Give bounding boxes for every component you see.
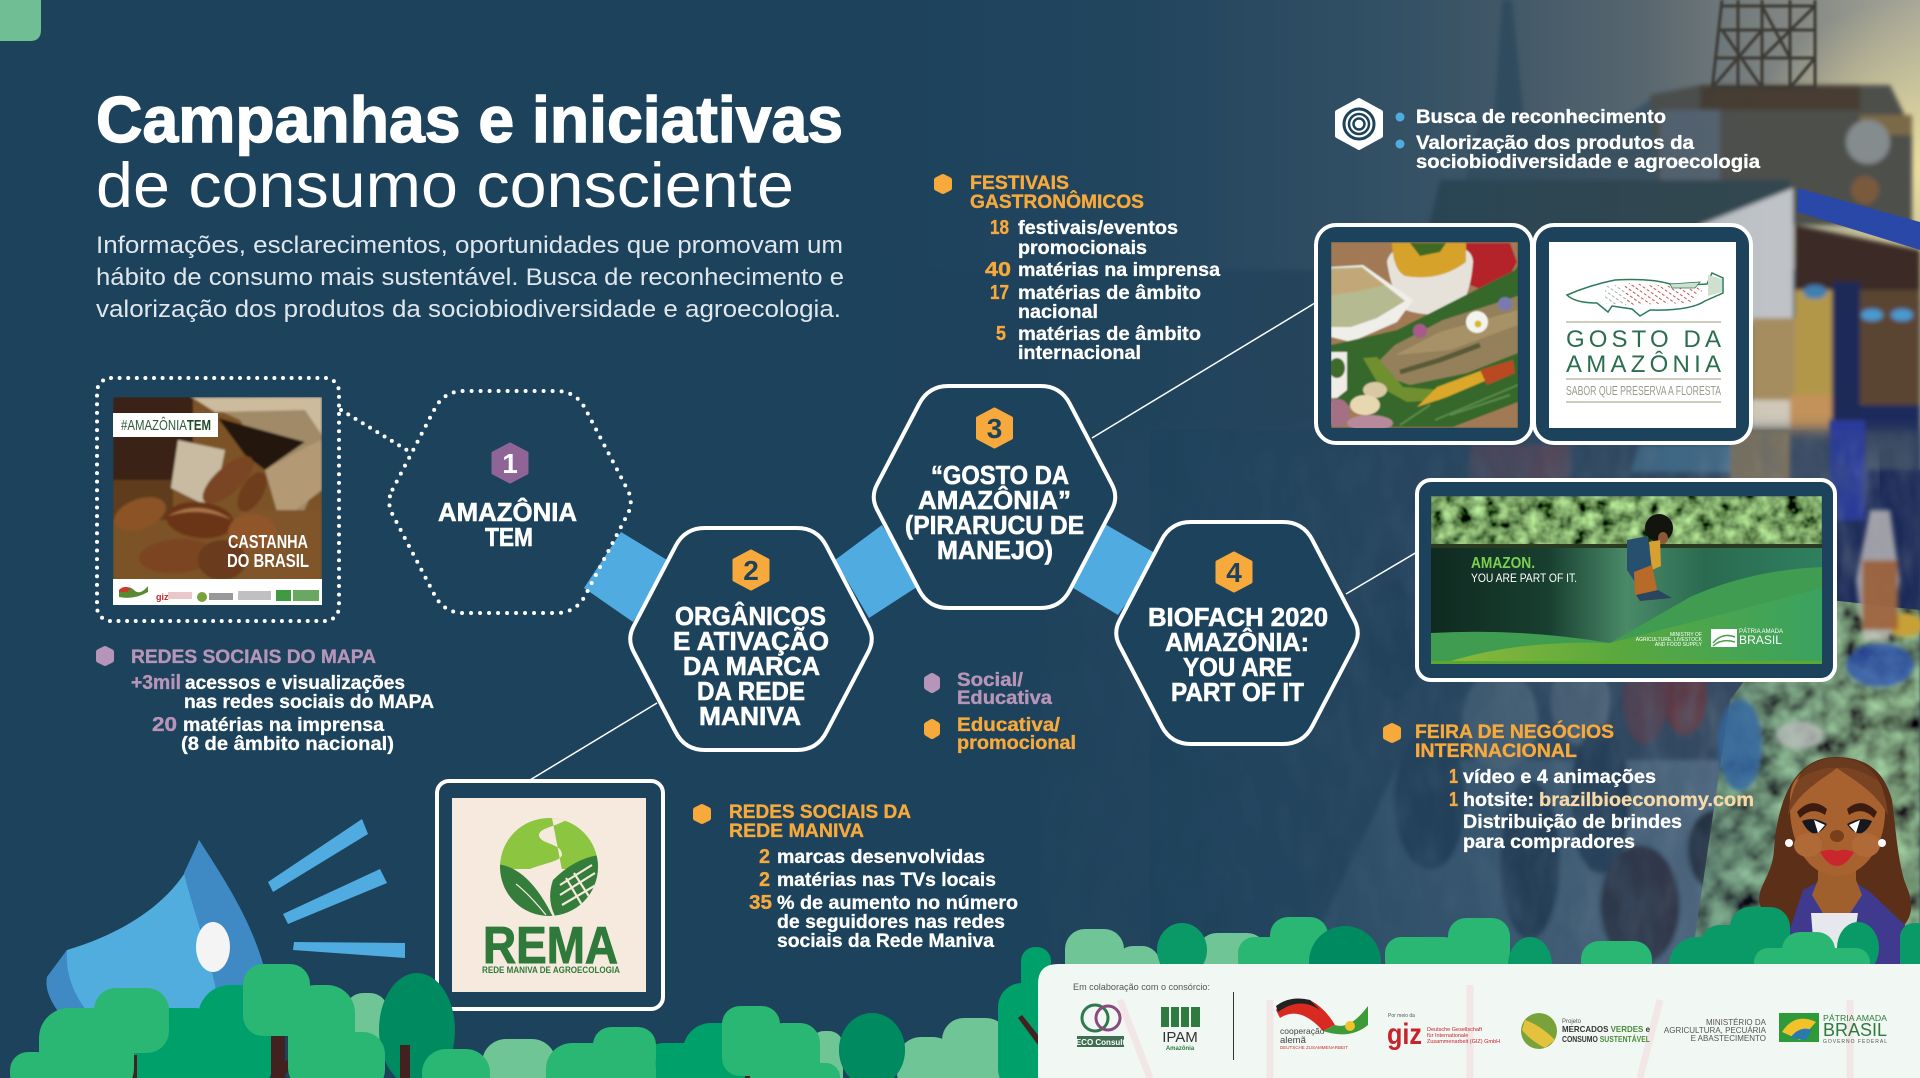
logo: giz: Zusammenarbeit (GIZ) GmbH [1427, 1039, 1500, 1045]
image panel: Amazon, you are part of it: YOU ARE PART OF IT. [1471, 573, 1577, 585]
forest foreground [10, 947, 1051, 1078]
stats: Redes sociais da Rede Maniva [696, 802, 1018, 952]
hexagon 4: Biofach: 4 [1226, 557, 1242, 588]
image panel: Amazon, you are part of it: PÁTRIA AMADA [1739, 628, 1783, 635]
hexagon 3: Gosto da Amazônia: (PIRARUCU DE [905, 510, 1084, 540]
icon: REMA leaf logo [496, 818, 600, 920]
stats: Festivais gastronômicos: 5 [996, 323, 1006, 345]
stats: Feira de negócios internacional [1386, 721, 1754, 853]
stats: Redes sociais da Rede Maniva: 2 [759, 846, 770, 868]
objectives list: Busca de reconhecimento [1416, 107, 1666, 128]
stats: Feira de negócios internacional: vídeo e 4 animações [1463, 766, 1656, 788]
stats: Festivais gastronômicos: promocionais [1018, 237, 1147, 259]
logo: Ministério da Agricultura: MINISTÉRIO DA [1706, 1018, 1767, 1027]
image panel: REMA logo [437, 781, 663, 1009]
stats: Redes sociais da Rede Maniva: 35 [749, 892, 772, 914]
hexagon 2: Orgânicos: DA MARCA [683, 651, 820, 681]
connector: MAPA image to hexagon 1 [341, 410, 410, 452]
logo: cooperação alemã: DEUTSCHE ZUSAMMENARBEIT [1280, 1045, 1348, 1050]
stats: Redes sociais da Rede Maniva: matérias nas TVs locais [777, 869, 996, 891]
logo: Mercados Verdes [1521, 1013, 1650, 1049]
legend: promocional [957, 733, 1076, 754]
megaphone [47, 819, 405, 1060]
stats: Feira de negócios internacional: FEIRA DE NEGÓCIOS [1415, 721, 1614, 743]
stats: Festivais gastronômicos: matérias de âmbito [1018, 323, 1201, 345]
hexagon 4: Biofach: AMAZÔNIA: [1165, 627, 1309, 657]
stats: Festivais gastronômicos: 17 [990, 282, 1009, 304]
icon: pirarucu fish [1567, 273, 1723, 316]
logo: IPAM [1161, 1007, 1200, 1052]
logo: IPAM: Amazônia [1166, 1046, 1195, 1052]
hexagon 3: Gosto da Amazônia: 3 [987, 413, 1002, 444]
title: de consumo consciente [96, 151, 794, 221]
image panel: food photo [1316, 225, 1532, 443]
icon: target in white hexagon [1337, 100, 1381, 148]
logo: Ministério da Agricultura: AGRICULTURA, PECUÁRIA [1664, 1026, 1767, 1035]
stats: Feira de negócios internacional: Distribuição de brindes [1463, 811, 1682, 833]
image panel: Gosto da Amazônia logo: GOSTO DA [1566, 326, 1721, 353]
icon: sound rays [268, 819, 405, 958]
consortium caption: Em colaboração com o consórcio: [1073, 982, 1210, 993]
stats: Redes sociais da Rede Maniva: de seguidores nas redes [777, 911, 1005, 933]
objectives list: sociobiodiversidade e agroecologia [1416, 152, 1760, 173]
crowd base [1040, 430, 1920, 990]
stats: Feira de negócios internacional: 1 [1449, 789, 1458, 811]
legend [927, 670, 1076, 754]
stats: Feira de negócios internacional: 1 [1449, 766, 1458, 788]
logo: giz [1387, 1013, 1500, 1051]
stats: Feira de negócios internacional: brazilbioeconomy.com [1539, 789, 1754, 811]
stats: Redes sociais do MAPA: matérias na imprensa [183, 714, 384, 736]
logo: cooperação alemã: alemã [1280, 1035, 1307, 1046]
stats: Festivais gastronômicos [937, 173, 1220, 364]
image panel: Gosto da Amazônia logo: AMAZÔNIA [1566, 350, 1721, 378]
logo: Ministério da Agricultura [1664, 1018, 1767, 1043]
objectives list: Valorização dos produtos da [1416, 133, 1694, 154]
character: woman [1759, 757, 1911, 964]
background photo: port and crowd [1186, 0, 1920, 964]
connector lines to images [530, 303, 1417, 780]
stats: Festivais gastronômicos: matérias de âmbito [1018, 282, 1201, 304]
stats: Redes sociais do MAPA: nas redes sociais do MAPA [184, 691, 434, 713]
stats: Feira de negócios internacional: INTERNACIONAL [1415, 741, 1577, 762]
hexagon 1: Amazônia Tem [389, 391, 631, 613]
intro paragraph: hábito de consumo mais sustentável. Busca de reconhecimento e [96, 264, 844, 291]
image panel: Amazônia Tem campaign: CASTANHA [228, 532, 308, 552]
stats: Redes sociais do MAPA: 20 [152, 714, 177, 736]
logo: Ministério da Agricultura: E ABASTECIMENTO [1691, 1034, 1766, 1043]
hexagon 3: Gosto da Amazônia: AMAZÔNIA” [918, 485, 1071, 515]
blue hexagon connectors [584, 520, 1160, 622]
hexagon 1: Amazônia Tem: TEM [485, 522, 533, 552]
image panel: Amazônia Tem campaign: DO BRASIL [227, 551, 309, 571]
stats: Festivais gastronômicos: festivais/eventos [1018, 217, 1178, 239]
stats: Festivais gastronômicos: FESTIVAIS [970, 173, 1069, 194]
image panel: Amazon, you are part of it: MINISTRY OF [1670, 632, 1702, 638]
trees behind footer [1065, 907, 1920, 998]
logo: Pátria Amada Brasil: GOVERNO FEDERAL [1823, 1039, 1887, 1045]
stats: Festivais gastronômicos: 40 [985, 259, 1011, 281]
image panel: Amazon, you are part of it: AMAZON. [1471, 555, 1535, 572]
logo: Mercados Verdes: Projeto [1562, 1019, 1582, 1025]
image panel: Amazônia Tem campaign [97, 378, 339, 621]
title [96, 83, 843, 221]
stats: Redes sociais da Rede Maniva: marcas desenvolvidas [777, 846, 985, 868]
image panel: Amazon, you are part of it: AND FOOD SUPPLY [1655, 642, 1703, 648]
stats: Festivais gastronômicos: matérias na imprensa [1018, 259, 1220, 281]
stats: Redes sociais do MAPA: (8 de âmbito nacional) [181, 733, 394, 755]
logo: cooperação alemã [1276, 998, 1368, 1050]
stats: Festivais gastronômicos: GASTRONÔMICOS [970, 191, 1144, 213]
logo: Mercados Verdes: MERCADOS VERDES e [1562, 1024, 1650, 1034]
foliage [1695, 600, 1920, 938]
stats: Redes sociais do MAPA: REDES SOCIAIS DO MAPA [131, 647, 376, 668]
logo: Pátria Amada Brasil: PÁTRIA AMADA [1823, 1014, 1888, 1023]
logo: giz: Por meio da [1388, 1013, 1415, 1019]
image panel: Amazon, you are part of it: BRASIL [1739, 633, 1782, 647]
hexagon 2: Orgânicos: ORGÂNICOS [675, 601, 826, 631]
stats: Redes sociais da Rede Maniva: REDES SOCIAIS DA [729, 802, 911, 823]
legend: Educativa/ [957, 715, 1061, 736]
title: Campanhas e iniciativas [96, 83, 843, 156]
logo: Mercados Verdes: CONSUMO SUSTENTÁVEL [1562, 1034, 1650, 1044]
hexagon 2: Orgânicos: 2 [743, 555, 759, 586]
hexagon 1: Amazônia Tem: 1 [502, 448, 518, 479]
hexagon 4: Biofach: BIOFACH 2020 [1148, 602, 1328, 632]
stats: Festivais gastronômicos: nacional [1018, 301, 1098, 323]
campaign hashtag: #AMAZÔNIATEM [121, 417, 211, 434]
stats: Redes sociais do MAPA [99, 647, 434, 755]
hexagon 4: Biofach [1116, 522, 1358, 744]
stats: Redes sociais da Rede Maniva: sociais da Rede Maniva [777, 930, 994, 952]
logo: giz: Deutsche Gesellschaft [1427, 1027, 1482, 1033]
logo: cooperação alemã: cooperação [1280, 1026, 1325, 1036]
hexagon 3: Gosto da Amazônia: “GOSTO DA [931, 460, 1069, 490]
objectives list [1396, 107, 1760, 173]
intro paragraph: valorização dos produtos da sociobiodiversidade e agroecologia. [96, 296, 841, 323]
stats: Festivais gastronômicos: internacional [1018, 342, 1141, 364]
image panel: Gosto da Amazônia logo [1534, 225, 1751, 443]
footer partner panel [1038, 964, 1920, 1078]
hexagon 3: Gosto da Amazônia [874, 386, 1115, 608]
stats: Redes sociais da Rede Maniva: % de aumento no número [777, 892, 1018, 914]
logo: Pátria Amada Brasil [1779, 1013, 1888, 1045]
intro paragraph [96, 232, 844, 323]
logo: Pátria Amada Brasil: BRASIL [1823, 1020, 1887, 1040]
image panel: REMA logo: REMA [483, 917, 618, 975]
image panel: Amazon, you are part of it [1417, 480, 1835, 680]
stats: Redes sociais do MAPA: acessos e visualizações [185, 672, 405, 694]
image panel: Amazônia Tem campaign: giz [156, 592, 169, 602]
legend: Educativa [957, 688, 1052, 709]
hexagon 2: Orgânicos: MANIVA [699, 701, 801, 731]
far mast [1490, 0, 1530, 180]
hexagon 2: Orgânicos: E ATIVAÇÃO [673, 626, 829, 656]
hexagon 3: Gosto da Amazônia: MANEJO) [937, 535, 1053, 565]
hexagon 2: Orgânicos: DA REDE [697, 676, 805, 706]
hexagon 1: Amazônia Tem: AMAZÔNIA [438, 497, 577, 527]
hexagon 4: Biofach: PART OF IT [1171, 677, 1304, 707]
green corner tab [0, 0, 41, 41]
logo: ECO Consult [1076, 1005, 1125, 1047]
logo: giz: für Internationale [1427, 1033, 1468, 1039]
hexagon 4: Biofach: YOU ARE [1183, 652, 1292, 682]
stats: Feira de negócios internacional: hotsite: [1463, 789, 1534, 811]
logo: IPAM: IPAM [1162, 1029, 1198, 1046]
stats: Redes sociais do MAPA: +3mil [131, 672, 181, 694]
derrick lattice [1712, 0, 1815, 90]
image panel: Gosto da Amazônia logo: SABOR QUE PRESERVA A FLORESTA [1566, 384, 1721, 398]
stats: Redes sociais da Rede Maniva: 2 [759, 869, 770, 891]
image panel: REMA logo: REDE MANIVA DE AGROECOLOGIA [482, 965, 620, 976]
stats: Festivais gastronômicos: 18 [990, 217, 1009, 239]
image panel: Amazon, you are part of it: AGRICULTURE, LIVESTOCK [1636, 637, 1703, 643]
stats: Redes sociais da Rede Maniva: REDE MANIVA [729, 821, 864, 842]
stats: Feira de negócios internacional: para compradores [1463, 831, 1635, 853]
hexagon 2: Orgânicos [630, 528, 872, 750]
intro paragraph: Informações, esclarecimentos, oportunidades que promovam um [96, 232, 843, 259]
logo: giz: giz [1387, 1018, 1422, 1051]
legend: Social/ [957, 670, 1024, 691]
logo: ECO Consult: ECO Consult [1076, 1038, 1125, 1047]
